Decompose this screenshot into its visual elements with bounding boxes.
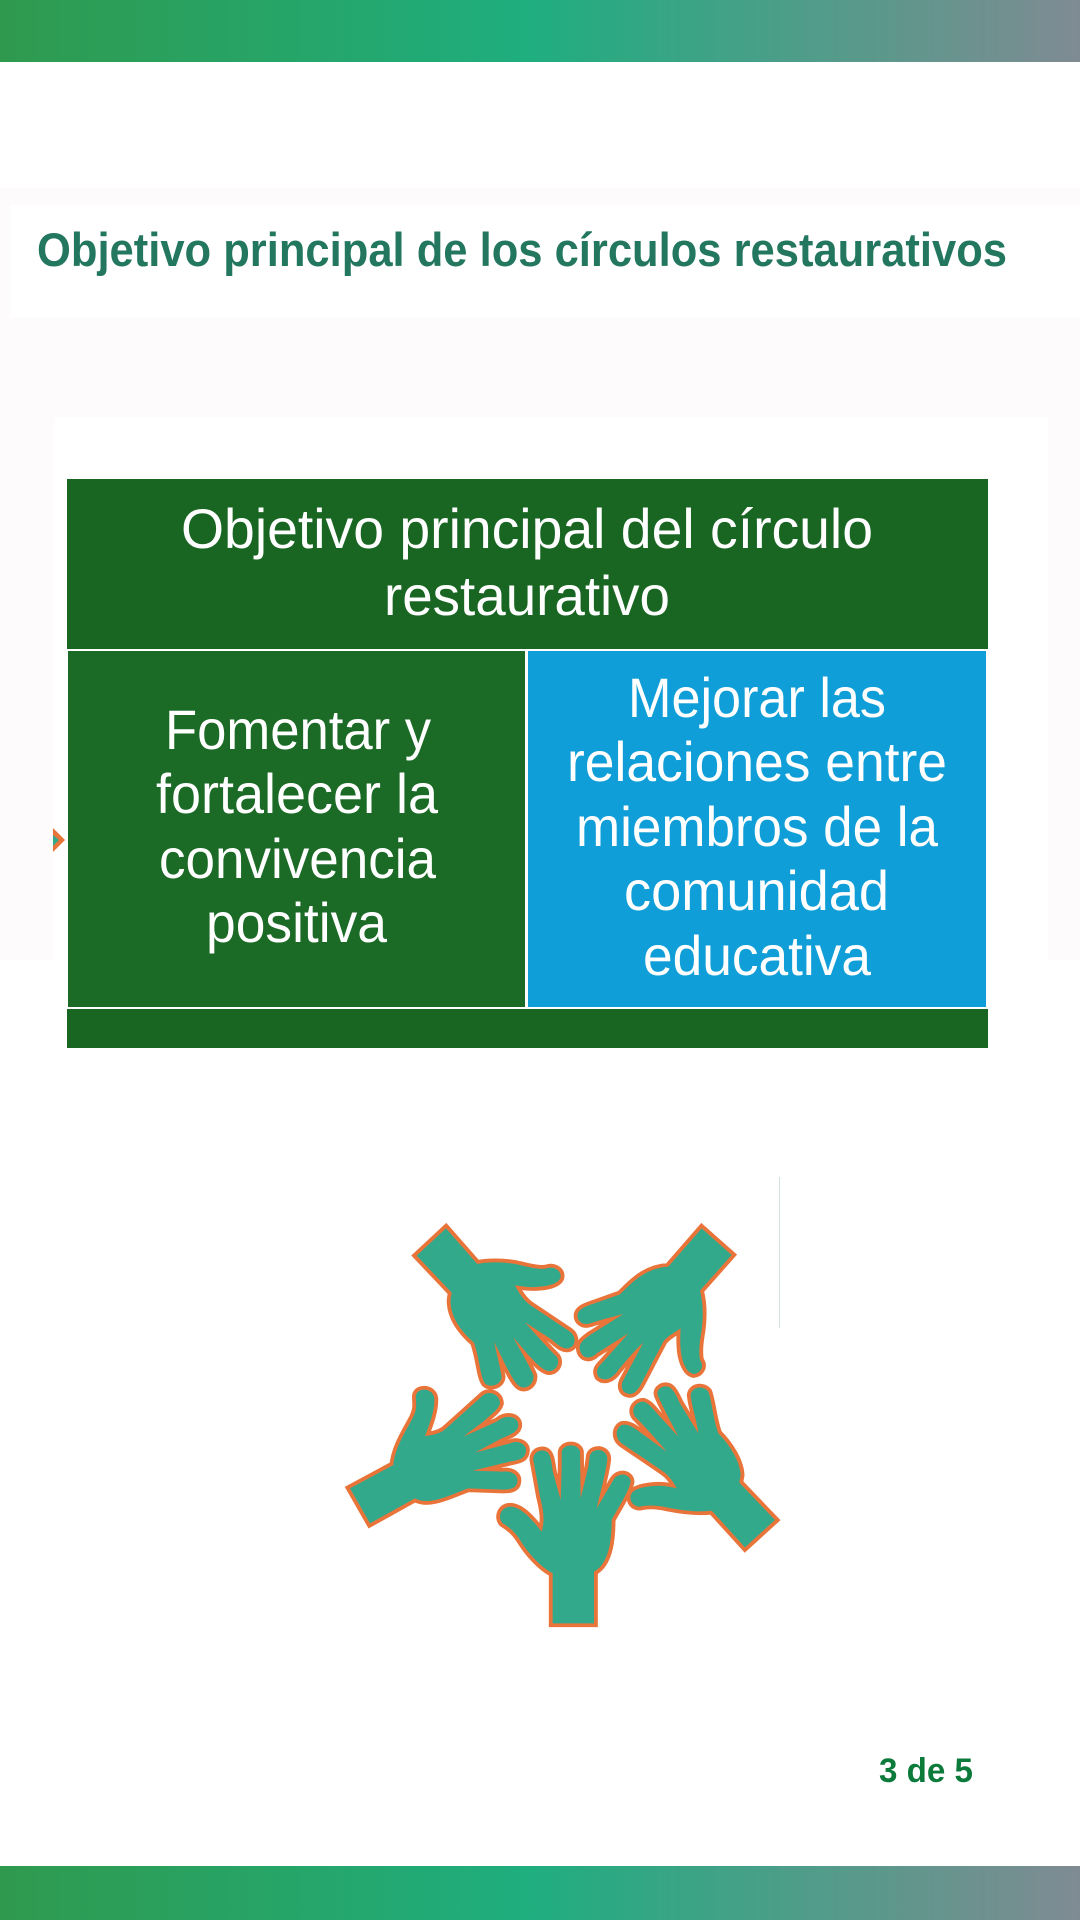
title band (10, 205, 1080, 318)
small arrow marker (53, 828, 65, 852)
page indicator: 3 de 5 (879, 1752, 973, 1790)
hand: bottom (500, 1445, 631, 1623)
table: objetivo principal (67, 479, 988, 1048)
pale background panel (0, 188, 1080, 960)
white content panel (54, 417, 1048, 960)
thin vertical line (779, 1177, 780, 1328)
cell: fomentar (68, 651, 525, 1007)
cell: mejorar (528, 651, 986, 1007)
table footer band (67, 1009, 988, 1048)
table header: Objetivo principal del círculo (181, 497, 873, 560)
title: Objetivo principal de los círculos restaurativos (37, 223, 1007, 276)
hand: lower left (350, 1390, 526, 1523)
hand: top right (578, 1228, 732, 1394)
hand: lower right (617, 1386, 775, 1547)
cell: fomentar: convivencia (159, 827, 437, 890)
cell: fomentar: fortalecer la (156, 762, 439, 825)
icon: five hands in a circle (350, 1228, 775, 1623)
bottom gradient bar (0, 1866, 1080, 1920)
table header (67, 479, 988, 649)
cell: mejorar: educativa (643, 924, 872, 987)
cell: mejorar: relaciones entre (567, 730, 947, 793)
cell: fomentar: Fomentar y (165, 698, 431, 761)
cell: mejorar: comunidad (624, 859, 889, 922)
cell: mejorar: Mejorar las (628, 666, 886, 729)
hand: top left (417, 1228, 575, 1388)
cell: fomentar: positiva (206, 891, 388, 954)
cell: mejorar: miembros de la (576, 795, 939, 858)
top gradient bar (0, 0, 1080, 62)
table header: restaurativo (384, 564, 670, 627)
